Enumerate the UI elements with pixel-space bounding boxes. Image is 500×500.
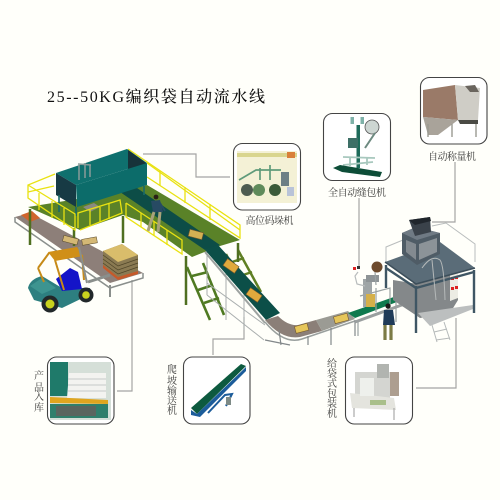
panel: bag-feeding packer — [346, 357, 412, 424]
label: warehouse: 入 — [34, 390, 44, 403]
label: warehouse — [34, 369, 44, 414]
support frame under ramp — [207, 250, 265, 340]
panel: bag sewing machine — [324, 114, 390, 180]
pallet of bags — [103, 244, 138, 280]
label: warehouse: 库 — [34, 401, 44, 414]
panel: automatic weigher — [420, 78, 487, 144]
panel: warehouse photo — [48, 357, 114, 424]
label: incline conveyor: 坡 — [167, 374, 177, 387]
title: 25--50KG编织袋自动流水线 — [47, 87, 265, 106]
label: bag-feeding packer: 装 — [327, 397, 337, 410]
label: incline conveyor — [167, 363, 177, 417]
label: bag-feeding packer: 式 — [327, 377, 337, 390]
weighing tower — [385, 223, 475, 342]
label: automatic weigher: 自动称量机 — [428, 150, 476, 163]
yellow rails front — [28, 174, 182, 254]
label: incline conveyor: 送 — [167, 395, 177, 407]
platform — [28, 185, 240, 305]
connector lines — [117, 154, 456, 391]
panel: incline conveyor — [184, 357, 250, 424]
stair — [187, 263, 224, 320]
worker on platform — [148, 195, 165, 232]
bagging line belt — [348, 288, 410, 336]
sewing unit on line — [353, 262, 382, 307]
label: warehouse: 产 — [34, 369, 44, 382]
feed belt — [120, 188, 220, 250]
label: warehouse: 品 — [34, 382, 44, 394]
label: bag sewing machine: 全自动缝包机 — [328, 186, 386, 199]
label: bag-feeding packer: 袋 — [327, 367, 337, 380]
label: bag-feeding packer: 给 — [327, 357, 337, 370]
weigher box and hopper — [402, 217, 440, 265]
background stair — [226, 250, 261, 292]
panel: palletizer — [234, 144, 300, 210]
loading deck conveyor — [15, 211, 143, 297]
yellow rails rear — [128, 149, 240, 238]
incline conveyor — [205, 245, 280, 323]
label: palletizer: 高位码垛机 — [246, 214, 294, 227]
label: bag-feeding packer: 包 — [327, 387, 337, 400]
label: incline conveyor: 输 — [167, 384, 177, 397]
label: incline conveyor: 爬 — [167, 363, 177, 376]
label: bag-feeding packer: 机 — [327, 407, 337, 420]
label: bag-feeding packer — [327, 357, 337, 420]
roller curve conveyor — [265, 311, 355, 345]
storage tank — [56, 149, 147, 216]
bags on line — [62, 229, 349, 333]
worker at bagging line — [383, 303, 395, 340]
forklift — [28, 247, 94, 312]
label: incline conveyor: 机 — [167, 404, 177, 417]
